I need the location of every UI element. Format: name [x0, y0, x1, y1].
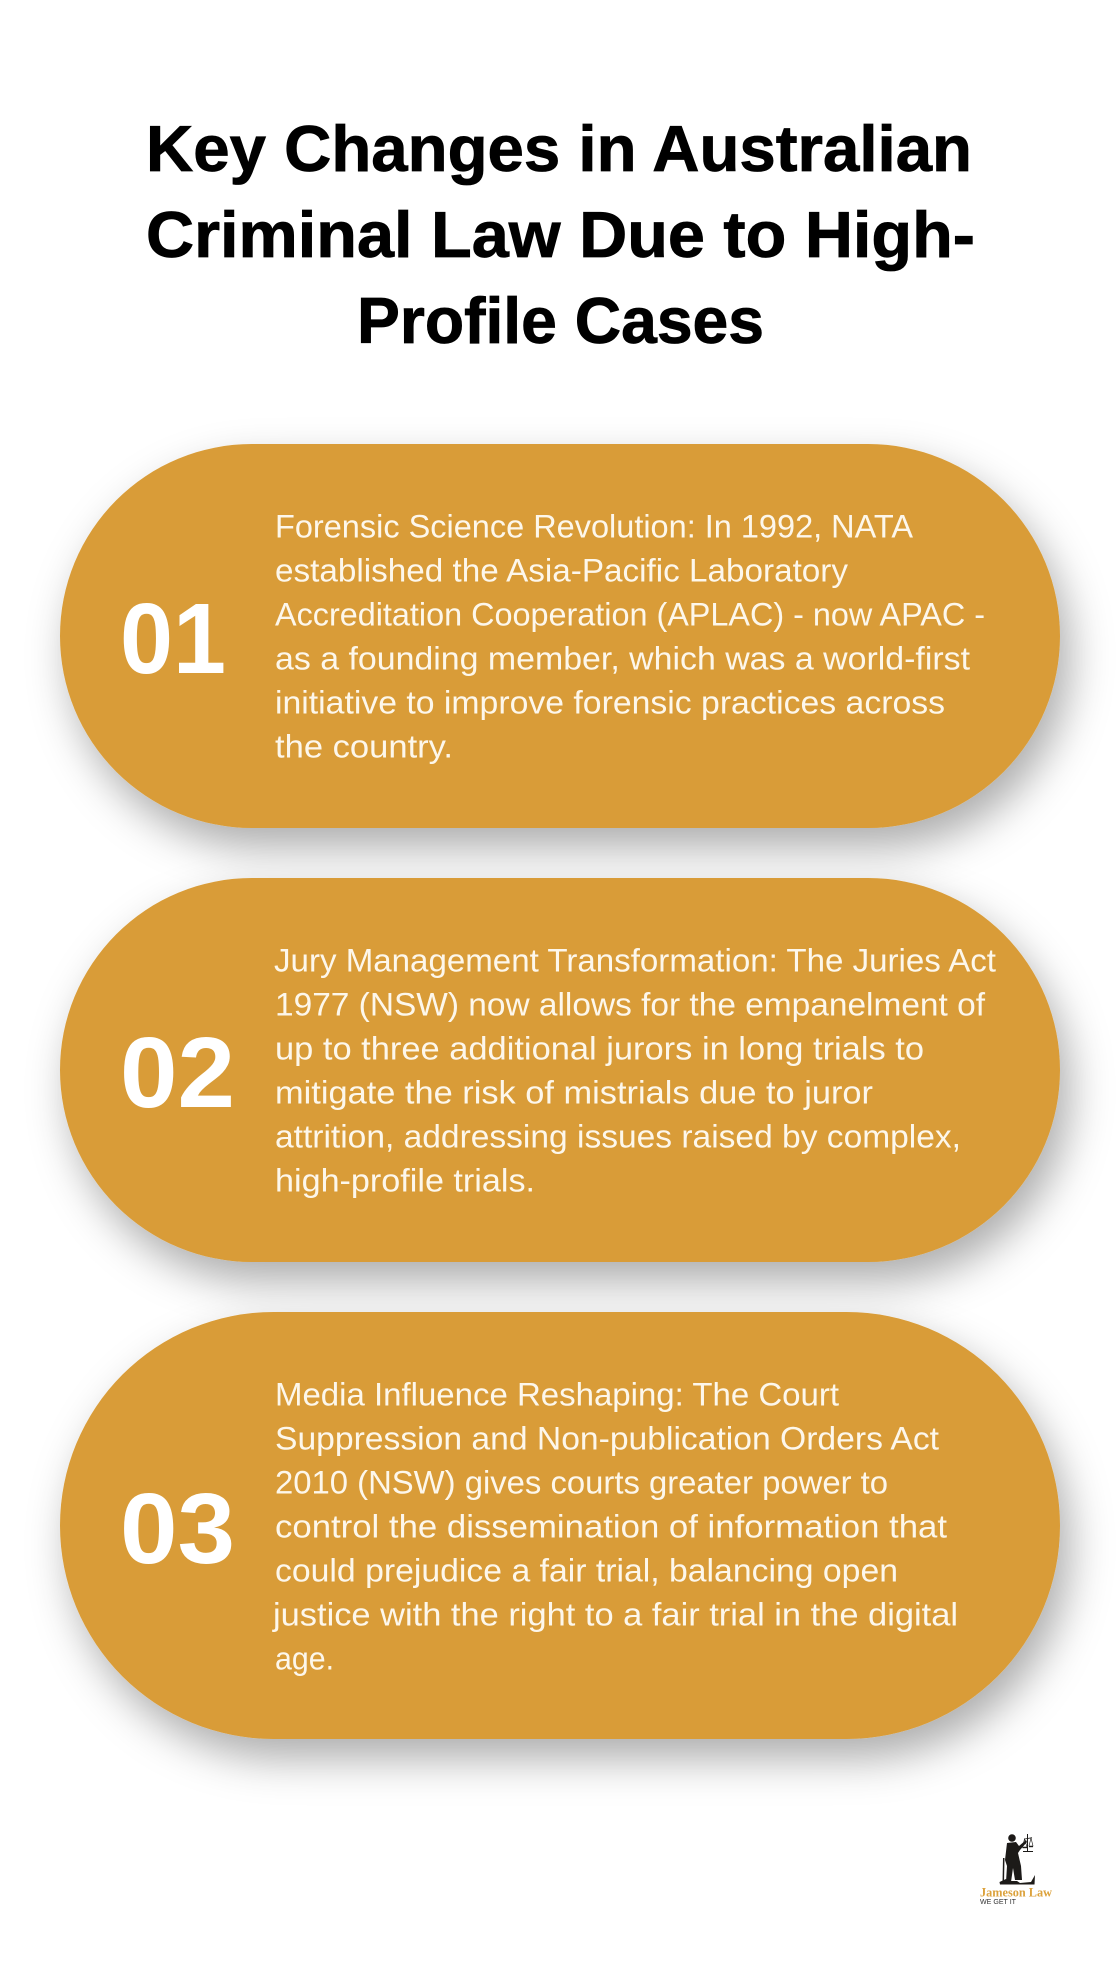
logo tagline: WE GET IT — [980, 1897, 1016, 1906]
pill background 2 — [60, 878, 1060, 1262]
number 03: 03 — [120, 1473, 235, 1585]
body text 2: mitigate the risk of mistrials due to juror — [275, 1074, 873, 1110]
title: Key Changes in Australian — [146, 112, 972, 185]
pill background 1 — [60, 444, 1060, 828]
body text 3 — [272, 1376, 958, 1676]
body text 2: high-profile trials. — [275, 1162, 535, 1198]
body text 2: up to three additional jurors in long trials to — [275, 1030, 924, 1066]
icon: lady justice with scales — [1000, 1834, 1035, 1884]
body text 3: Media Influence Reshaping: The Court — [275, 1376, 839, 1412]
body text 1: initiative to improve forensic practices across — [275, 684, 945, 720]
body text 2: Jury Management Transformation: The Juries Act — [274, 942, 996, 978]
body text 1 — [275, 508, 985, 764]
body text 3: could prejudice a fair trial, balancing open — [275, 1552, 898, 1588]
panel: jury management transformation — [60, 878, 1060, 1262]
logo wordmark: Jameson Law — [980, 1886, 1052, 1900]
body text 3: control the dissemination of information that — [275, 1508, 947, 1544]
pill background 3 — [60, 1312, 1060, 1739]
title — [146, 112, 975, 357]
logo: Jameson Law — [980, 1834, 1052, 1906]
body text 2: 1977 (NSW) now allows for the empanelment of — [275, 986, 985, 1022]
body text 1: as a founding member, which was a world-first — [275, 640, 970, 676]
title: Criminal Law Due to High- — [146, 198, 975, 271]
body text 1: Forensic Science Revolution: In 1992, NATA — [275, 508, 914, 544]
body text 1: the country. — [275, 728, 453, 764]
title: Profile Cases — [357, 284, 764, 357]
panel: forensic science revolution — [60, 444, 1060, 828]
panel: media influence reshaping — [60, 1312, 1060, 1739]
number 02: 02 — [120, 1017, 235, 1129]
body text 2: attrition, addressing issues raised by complex, — [275, 1118, 961, 1154]
body text 1: established the Asia-Pacific Laboratory — [275, 552, 848, 588]
body text 1: Accreditation Cooperation (APLAC) - now APAC - — [275, 596, 985, 632]
number 01: 01 — [120, 583, 226, 695]
body text 3: age. — [275, 1640, 334, 1676]
body text 3: justice with the right to a fair trial in the digital — [272, 1596, 958, 1632]
body text 2 — [274, 942, 996, 1198]
body text 3: Suppression and Non-publication Orders Act — [275, 1420, 939, 1456]
body text 3: 2010 (NSW) gives courts greater power to — [275, 1464, 888, 1500]
